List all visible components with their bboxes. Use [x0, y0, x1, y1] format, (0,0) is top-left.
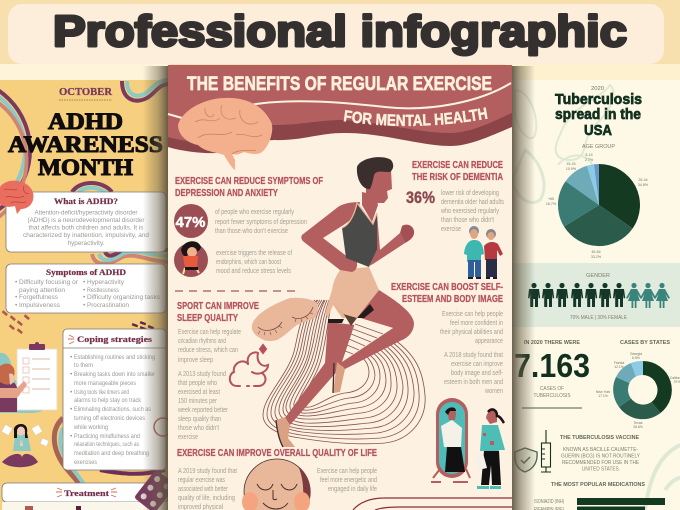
month label: OCTOBER: [59, 86, 113, 98]
card: symptoms: Impulsiveness: [19, 302, 61, 309]
card: what is ADHD: [6, 192, 166, 252]
chart: cases by states donut: 26.6%: [633, 425, 643, 429]
fist: [400, 225, 414, 243]
card: coping strategies: •: [70, 389, 73, 396]
section: dementia: than those who didn't: [441, 215, 494, 224]
band: gender: GENDER: [586, 273, 610, 279]
card: what is ADHD: that affects both children and adults. It is: [28, 224, 144, 232]
text: vaccine info: RECOMMENDED FOR USE IN THE: [562, 460, 639, 466]
section: sleep quality: sleep quality than: [178, 414, 221, 423]
shorts shadow: [333, 303, 357, 326]
section: depression and anxiety: than those who don't exercise: [215, 226, 288, 235]
section: quality of life: [177, 448, 377, 510]
band: gender: 70% MALE | 30% FEMALE: [570, 315, 627, 321]
section: depression and anxiety: EXERCISE CAN REDUCE SYMPTOMS OF: [175, 176, 323, 187]
section: self-esteem: Exercise can help people: [442, 309, 503, 318]
section: quality of life: associated with better: [178, 484, 228, 493]
card: coping strategies: Coping strategies: [77, 334, 153, 344]
chart: cases by states donut: New York: [596, 390, 610, 394]
section: depression and anxiety: of people who exercise regularly: [215, 207, 294, 216]
stat: total cases: IN 2020 THERE WERE: [524, 340, 580, 346]
card: symptoms: •: [83, 302, 86, 309]
section: depression and anxiety: mood and reduce stress levels: [216, 266, 291, 275]
section: depression and anxiety: DEPRESSION AND ANXIETY: [175, 188, 278, 199]
hair: [357, 157, 393, 189]
icon: clock partial: [154, 418, 172, 436]
chart: cases by states donut: CASES BY STATES: [620, 340, 670, 346]
text: vaccine info: [560, 435, 640, 472]
dash marks: [2, 310, 30, 334]
illustration: sleeping pillow: [252, 298, 318, 341]
chart: age group pie: 2.7%: [585, 158, 594, 162]
chart: medications bars: [534, 482, 665, 510]
chart: age group pie: [546, 153, 649, 259]
card: what is ADHD: characterized by inattention, impulsivity, and: [23, 232, 149, 239]
card: coping strategies: to them: [74, 362, 93, 369]
section: sleep quality: exercise: [178, 432, 198, 441]
section: quality of life: engaged in daily life: [328, 484, 377, 493]
section: self-esteem: appearance: [475, 336, 503, 345]
card: symptoms: Symptoms of ADHD: [46, 268, 126, 277]
card: coping strategies: Practicing mindfulness and: [74, 433, 140, 440]
card: symptoms: paying attention: [19, 287, 65, 294]
card: coping strategies: [63, 329, 166, 470]
chart: cases by states donut: 17.1%: [598, 394, 608, 398]
section: quality of life: feel more energetic and: [320, 475, 377, 484]
section: depression and anxiety: report fewer symptoms of depression: [215, 217, 307, 226]
illustration: meditating woman: [0, 424, 49, 470]
chart: age group pie: 15-24: [566, 162, 576, 166]
stat: 47 percent: [174, 204, 208, 238]
bacteria watermark: [512, 85, 680, 510]
card: treatment: Treatment: [64, 488, 109, 498]
back foot: [276, 417, 295, 447]
card: coping strategies: •: [70, 433, 73, 440]
card: coping strategies: Establishing routines and sticking: [74, 354, 155, 361]
section: self-esteem: feel more confident in: [450, 318, 503, 327]
card: coping strategies: •: [70, 406, 73, 413]
section: dementia: EXERCISE CAN REDUCE: [412, 160, 503, 171]
section: sleep quality: A 2013 study found: [178, 369, 226, 378]
stat: 47 percent: 47%: [176, 214, 206, 231]
icon: happy child: [174, 241, 208, 277]
card: coping strategies: alarms to help stay on track: [74, 397, 142, 404]
stat: total cases: TUBERCULOSIS: [534, 393, 571, 399]
icon: cloud and moon: [230, 345, 268, 386]
section: self-esteem: exercise can improve: [451, 359, 503, 368]
card: coping strategies: •: [70, 354, 73, 361]
icon: pill blister pack: [134, 469, 176, 510]
subheading: for mental health: FOR MENTAL HEALTH: [344, 107, 488, 126]
poster title: ADHD: [48, 109, 123, 134]
section: sleep quality: Exercise can help regulate: [178, 327, 241, 336]
card: symptoms: •: [83, 294, 86, 301]
illustration: person at mirror: [431, 398, 505, 489]
section: dementia: dementia older had adults: [441, 197, 504, 206]
shadow: left panel edge: [143, 66, 170, 510]
divider dashed: [175, 290, 296, 292]
card: coping strategies: Breaking tasks down into smaller: [74, 371, 156, 378]
section: self-esteem: women: [484, 386, 503, 395]
poster title: [8, 109, 163, 180]
text: vaccine info: UNITED STATES.: [582, 466, 620, 472]
chart: age group pie: 16.7%: [546, 202, 557, 206]
card: coping strategies: relaxation techniques, such as: [74, 441, 140, 448]
card: symptoms: [6, 264, 166, 313]
section: sleep quality: exercised at least: [178, 387, 220, 396]
card: coping strategies: Using tools like timers and: [74, 389, 129, 396]
tank top: [342, 203, 377, 267]
stat: 36 percent: 36%: [406, 188, 435, 207]
shorts: [325, 267, 379, 318]
year label: 2020: [591, 86, 604, 92]
section: depression and anxiety: [174, 176, 323, 277]
section: self-esteem: ESTEEM AND BODY IMAGE: [402, 294, 503, 305]
card: coping strategies: exercises: [74, 459, 98, 466]
card: symptoms: Restlessness: [87, 287, 120, 294]
section: sleep quality: improve sleep: [178, 355, 213, 364]
section: sleep quality: week reported better: [177, 405, 228, 414]
card: symptoms: Difficulty focusing or: [19, 279, 79, 286]
face: [366, 170, 392, 203]
card: symptoms: •: [83, 279, 86, 286]
panel: tuberculosis poster: [505, 64, 680, 510]
heading: tuberculosis: [555, 91, 642, 139]
section: dementia: who exercised regularly: [440, 206, 499, 215]
poster title: MONTH: [38, 155, 133, 180]
card: coping strategies: turning off electronic devices: [74, 415, 146, 422]
card: symptoms: Difficulty organizing tasks: [87, 294, 161, 301]
section: quality of life: regular exercise was: [178, 475, 225, 484]
front foot: [333, 362, 345, 393]
striped inner leg: [342, 317, 393, 362]
heading: tuberculosis: USA: [584, 122, 612, 139]
section: dementia: exercise: [441, 224, 461, 233]
decorative bottom stripes: [353, 498, 512, 510]
section: dementia: lower risk of developing: [441, 188, 499, 197]
card: what is ADHD: (ADHD) is a neurodevelopmental disorder: [28, 217, 145, 224]
stat: total cases: [514, 340, 590, 408]
card: symptoms: Forgetfulness: [19, 294, 59, 301]
chart: cases by states donut: 12.1%: [614, 365, 624, 369]
section: self-esteem: their physical abilities and: [440, 327, 503, 336]
front arm: [369, 213, 405, 266]
icon: syringe: [541, 430, 551, 472]
section: dementia: [406, 160, 504, 279]
section: self-esteem: [391, 282, 503, 395]
illustration: woman with clipboard: [0, 342, 57, 413]
card: coping strategies: Eliminating distractions, such as: [74, 406, 152, 413]
section: depression and anxiety: exercise triggers the release of: [216, 248, 293, 257]
heading: tuberculosis: spread in the: [555, 106, 641, 123]
section: sleep quality: those who didn't: [178, 423, 219, 432]
card: what is ADHD: What is ADHD?: [54, 197, 118, 206]
panel: benefits of exercise poster: [168, 65, 512, 510]
stat: total cases: 7.163: [514, 347, 590, 384]
back arm: [301, 202, 360, 272]
illustration: flowing contour lines: [263, 300, 425, 444]
section: quality of life: EXERCISE CAN IMPROVE OVERALL QUALITY OF LIFE: [177, 448, 377, 459]
panel: ADHD awareness poster: [0, 64, 176, 510]
illustration: smiling face: [242, 459, 311, 510]
heading: benefits of regular exercise: THE BENEFITS OF REGULAR EXERCISE: [187, 74, 492, 95]
chart: age group pie: 10.9%: [566, 167, 577, 171]
chart: cases by states donut: Florida: [614, 361, 624, 365]
text: vaccine info: THE TUBERCULOSIS VACCINE: [560, 435, 639, 441]
card: symptoms: •: [15, 279, 18, 286]
section: sleep quality: SPORT CAN IMPROVE: [177, 301, 259, 312]
band: gender: [505, 263, 680, 327]
poster title: AWARENESS: [8, 132, 163, 157]
chart: cases by states donut: Georgia: [630, 352, 642, 356]
card: symptoms: •: [83, 287, 86, 294]
section: quality of life: Exercise can help people: [317, 466, 377, 475]
card: what is ADHD: hyperactivity.: [68, 240, 105, 247]
card: coping strategies: •: [70, 371, 73, 378]
heading: tuberculosis: Tuberculosis: [555, 91, 642, 108]
text: vaccine info: GUERIN (BCG) IS NOT ROUTINELY: [561, 454, 640, 460]
card: coping strategies: more manageable pieces: [74, 380, 137, 387]
back leg: [285, 322, 355, 425]
section: quality of life: quality of life, including: [178, 493, 235, 502]
icon: vaccine shield: [515, 448, 537, 472]
text: vaccine info: KNOWN AS BACILLE CALMETTE-: [563, 447, 638, 453]
illustration: elderly couple: [464, 226, 503, 279]
section: sleep quality: circadian rhythms and: [178, 336, 226, 345]
card: symptoms: •: [15, 294, 18, 301]
banner: title pill: [8, 4, 664, 64]
card: treatment: [2, 483, 170, 510]
stat: total cases: CASES OF: [540, 386, 565, 392]
chart: medications bars: THE MOST POPULAR MEDICATIONS: [551, 482, 645, 488]
section: depression and anxiety: endorphins, which can boost: [216, 257, 281, 266]
section: self-esteem: A 2018 study found that: [444, 350, 503, 359]
decorative rainbow arcs: [0, 78, 170, 498]
section: sleep quality: 150 minutes per: [178, 396, 217, 405]
chart: cases by states donut: Texas: [634, 421, 643, 425]
card: what is ADHD: Attention-deficit/hyperactivity disorder: [34, 210, 138, 216]
section: self-esteem: EXERCISE CAN BOOST SELF-: [391, 282, 503, 293]
section: self-esteem: esteem in both men and: [444, 377, 503, 386]
neck: [362, 192, 378, 222]
card: coping strategies: meditation and deep breathing: [74, 450, 149, 457]
card: coping strategies: while working: [73, 424, 108, 431]
front leg: [338, 290, 414, 369]
illustration: brain: [178, 98, 272, 170]
chart: age group pie: 33.2%: [591, 255, 602, 259]
section: dementia: THE RISK OF DEMENTIA: [412, 172, 503, 183]
chart: age group pie: 34.8%: [638, 183, 649, 187]
shadow: right panel edge: [510, 66, 535, 510]
section: sleep quality: that people who: [178, 378, 217, 387]
label: age group: AGE GROUP: [582, 144, 615, 150]
banner: title pill: Professional infographic: [53, 7, 627, 56]
section: quality of life: A 2019 study found that: [178, 466, 237, 475]
section: sleep quality: SLEEP QUALITY: [177, 313, 238, 324]
header wave: [168, 65, 512, 153]
section: sleep quality: [177, 301, 259, 441]
chart: age group pie: 25-44: [638, 178, 648, 182]
icon: brain small: [0, 181, 34, 214]
card: symptoms: Procrastination: [87, 302, 129, 309]
section: sleep quality: reduce stress, which can: [178, 345, 238, 354]
chart: age group pie: +65: [548, 197, 554, 201]
card: symptoms: Hyperactivity: [87, 279, 125, 286]
chart: medications bars: ISONIAZID (INH): [534, 499, 564, 505]
card: symptoms: •: [15, 302, 18, 309]
chart: age group pie: 45-64: [591, 250, 601, 254]
chart: cases by states donut: [596, 340, 680, 429]
chart: age group pie: 5-14: [585, 153, 593, 157]
chart: cases by states donut: 6.5%: [632, 356, 640, 360]
illustration: runner: [276, 157, 414, 447]
section: self-esteem: body image and self-: [451, 368, 503, 377]
